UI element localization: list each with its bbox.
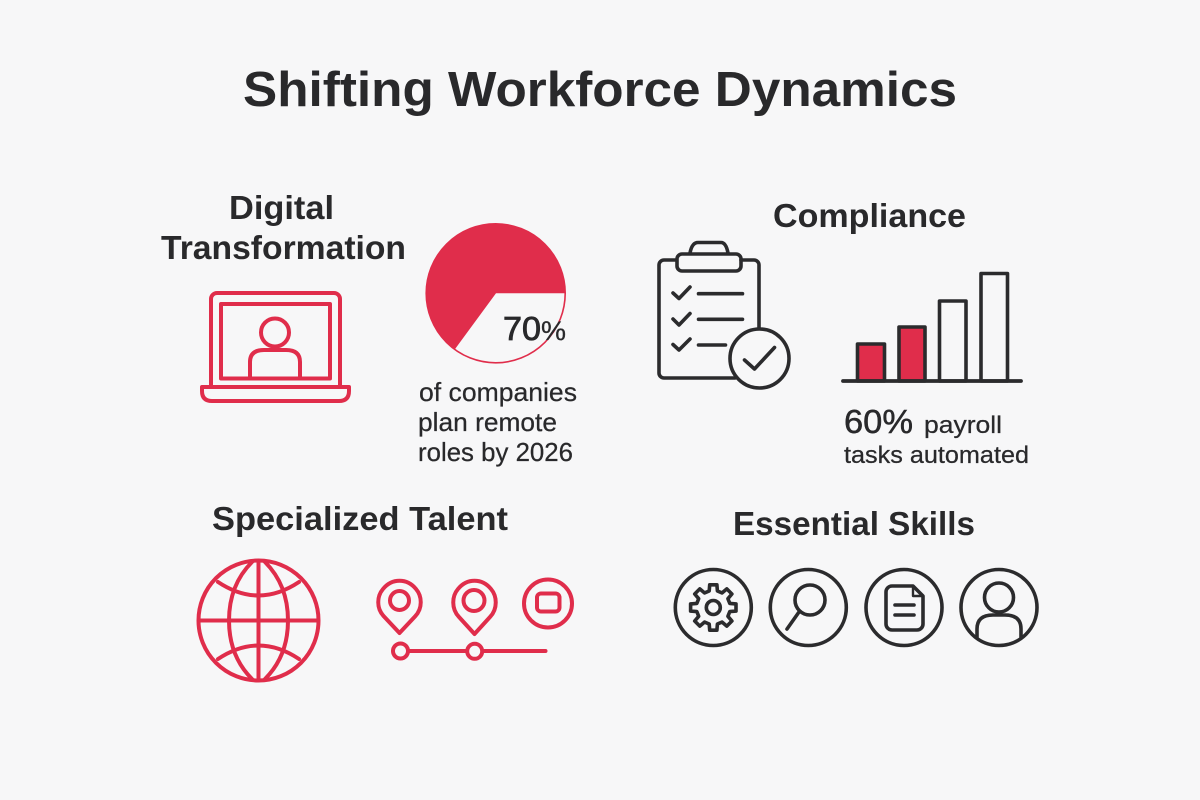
heading: digital transformation: Digital: [229, 189, 334, 226]
text: payroll statistic: tasks automated: [844, 442, 1029, 469]
icon: globe: [198, 560, 318, 680]
icon: document: [866, 570, 942, 646]
icon: gear: [675, 570, 751, 646]
heading: digital transformation: Transformation: [161, 229, 406, 266]
panel: compliance: [659, 197, 1029, 469]
pie chart: 70%: [426, 224, 566, 363]
icon: laptop with person: [202, 293, 349, 401]
pie chart: 70%: 70: [503, 310, 541, 347]
panel: essential skills: [675, 505, 1037, 646]
panel: digital transformation: [161, 189, 577, 467]
icon: clipboard checklist: [659, 242, 789, 388]
icon: person: [961, 570, 1037, 646]
icon: location pins: [378, 580, 572, 634]
panel: specialized talent: [198, 500, 572, 680]
text: payroll statistic: [844, 403, 1029, 469]
bar chart: payroll automation: [843, 274, 1021, 381]
text: remote roles statistic: [418, 377, 577, 467]
heading: compliance: Compliance: [773, 197, 966, 234]
pie chart: 70%: %: [541, 316, 566, 346]
title: Shifting Workforce Dynamics: [243, 63, 957, 117]
text: payroll statistic: payroll: [924, 412, 1002, 439]
text: remote roles statistic: plan remote: [418, 407, 557, 437]
heading: specialized talent: Specialized Talent: [212, 500, 508, 537]
text: remote roles statistic: of companies: [419, 377, 577, 407]
icon: magnifier: [770, 570, 846, 646]
text: payroll statistic: 60%: [844, 403, 913, 440]
text: remote roles statistic: roles by 2026: [418, 437, 573, 467]
icon: timeline: [393, 644, 546, 659]
heading: digital transformation: [161, 189, 406, 266]
heading: essential skills: Essential Skills: [733, 505, 975, 542]
